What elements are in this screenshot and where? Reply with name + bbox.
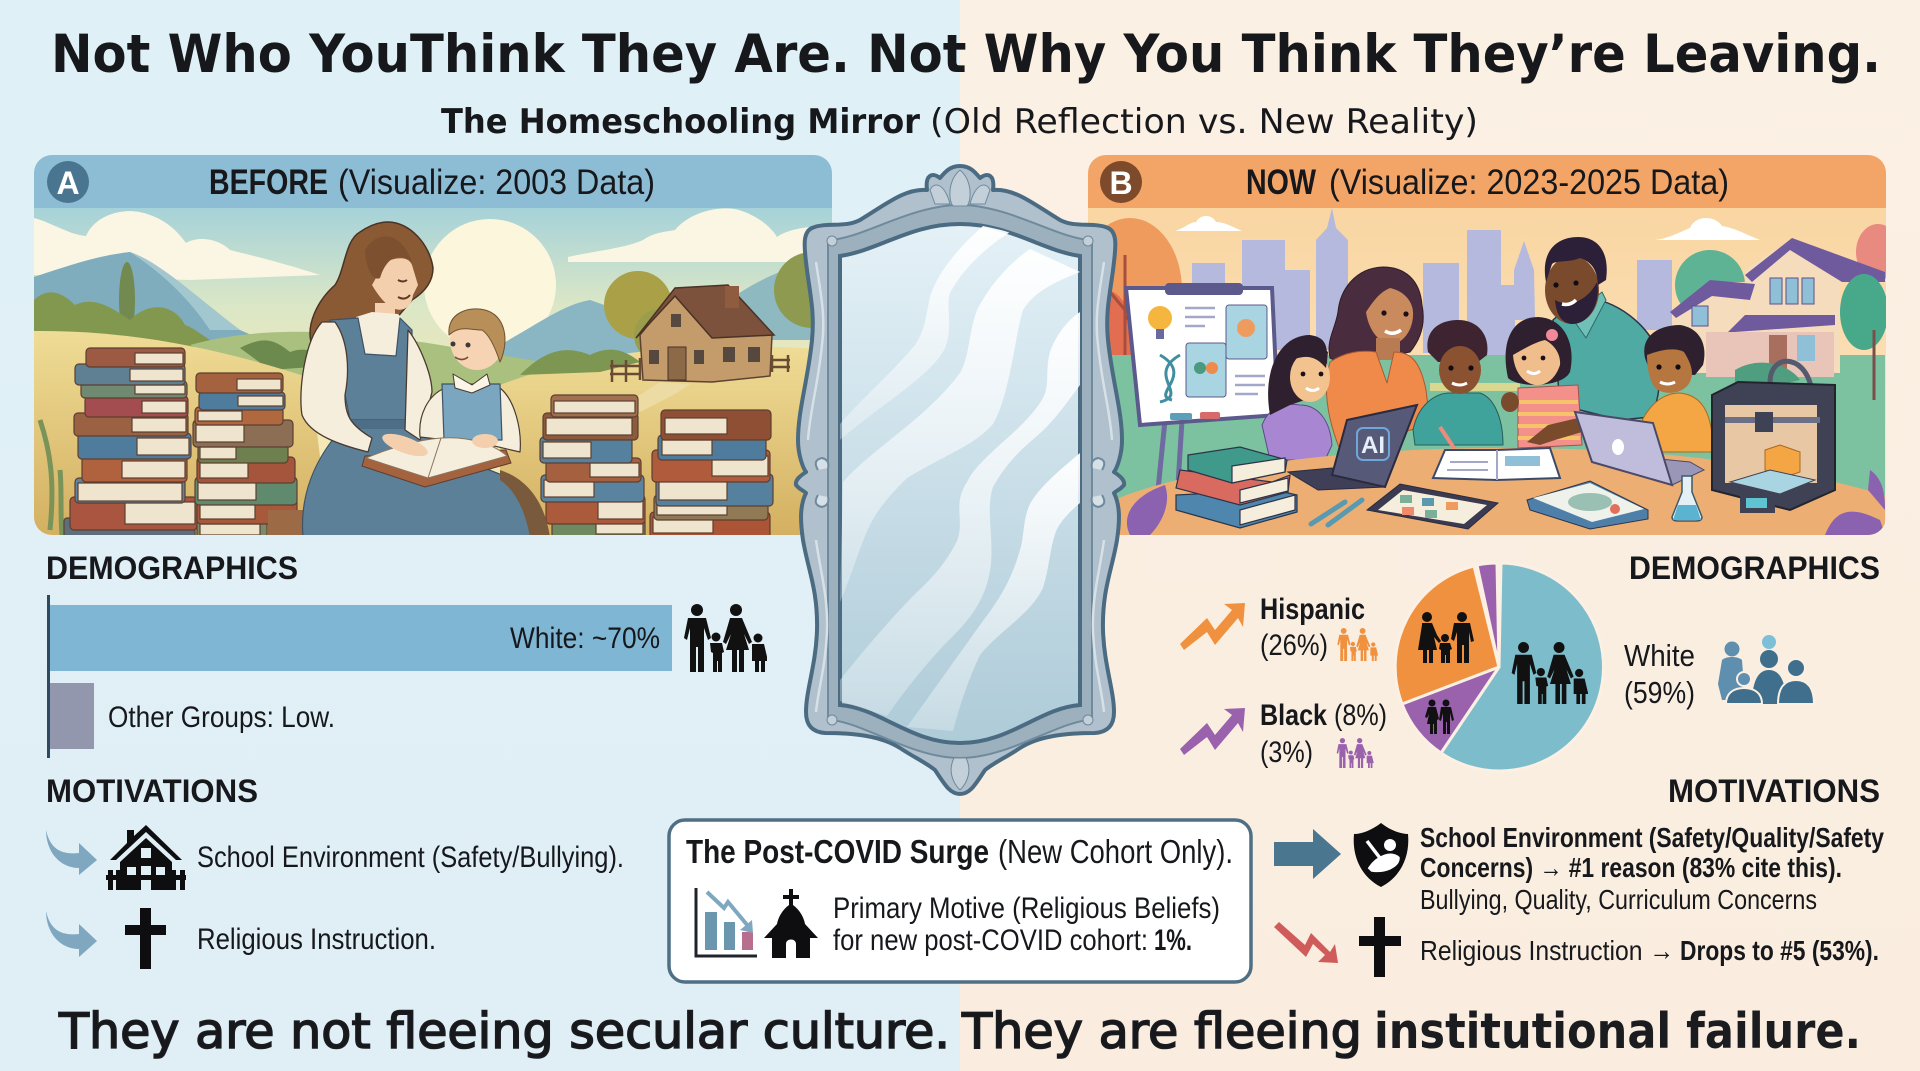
motivation: religious instruction: Religious Instruction.: [197, 923, 436, 956]
book stack 3: [540, 395, 645, 538]
suburban house: [1670, 238, 1888, 400]
AI laptop: AI: [1361, 432, 1385, 459]
arrow: red decline: [1274, 922, 1338, 963]
badge A: A: [56, 165, 80, 201]
panel: before illustration: [34, 155, 850, 538]
book pile: [1176, 447, 1297, 528]
open book: [362, 429, 511, 487]
callout: post-covid surge: (New Cohort Only).: [998, 833, 1233, 870]
child in teal: [1413, 320, 1503, 460]
panel header: now: [1088, 155, 1886, 208]
father's pointing hand: [1527, 418, 1582, 445]
label: white: [1624, 638, 1695, 710]
book stacks: [64, 348, 773, 538]
trend arrow: hispanic: [1180, 603, 1245, 650]
panel header: now: (Visualize: 2023-2025 Data): [1329, 163, 1729, 202]
rural landscape: [34, 208, 850, 535]
bottom conclusion: [58, 1003, 1861, 1060]
icon: declining bar chart: [696, 888, 757, 956]
pie chart: now demographics: [1395, 563, 1603, 771]
label: black: Black: [1260, 699, 1327, 732]
whiteboard: [1126, 283, 1278, 490]
mirror frame: [796, 166, 1124, 794]
tablet: [1367, 484, 1498, 529]
arrow: curved: [46, 911, 97, 957]
badge A: [47, 161, 89, 203]
text: religious instruction now: [1420, 935, 1879, 966]
mother: [1326, 267, 1428, 450]
heading: right demographics: DEMOGRAPHICS: [1629, 550, 1880, 586]
text: school environment now: [1420, 822, 1884, 915]
bottom conclusion: They are fleeing: [961, 1003, 1362, 1060]
bottom conclusion: They are not fleeing secular culture.: [58, 1003, 950, 1060]
3D printer: [1712, 361, 1835, 513]
book stack 4: [650, 410, 773, 538]
atlas book: [1527, 481, 1648, 529]
panel: now illustration: [1075, 155, 1900, 535]
subtitle: (Old Reflection vs. New Reality): [930, 102, 1478, 142]
callout: post-covid surge: 1%.: [1154, 924, 1192, 957]
label: white: (59%): [1624, 675, 1695, 710]
panel header: before: BEFORE: [209, 163, 328, 202]
icon: church: [764, 889, 818, 958]
boy: [420, 309, 520, 452]
foliage corners: [1127, 470, 1885, 535]
icon: diverse group: [1718, 635, 1814, 704]
AI laptop: [1288, 405, 1417, 490]
label: black: [1260, 699, 1387, 769]
heading: left demographics: DEMOGRAPHICS: [46, 550, 298, 586]
badge B: B: [1109, 165, 1133, 201]
label: black: (8%): [1334, 699, 1387, 732]
child in stripes: [1501, 317, 1582, 448]
icon: cross: [1359, 917, 1401, 977]
silver laptop: [1575, 412, 1704, 485]
badge B: [1100, 161, 1142, 203]
callout: post-covid surge: for new post-COVID cohort:: [833, 924, 1148, 957]
bar: white 70%: White: ~70%: [510, 622, 660, 655]
label: hispanic: (26%): [1260, 629, 1328, 662]
background: left half: [0, 0, 960, 1071]
panel header: now: NOW: [1246, 163, 1316, 202]
subtitle: [441, 102, 1478, 142]
icon: cross: [125, 908, 166, 969]
panel header: before: [34, 155, 832, 208]
text: religious instruction now: Religious Instruction →: [1420, 935, 1674, 966]
urban backdrop: [1075, 208, 1900, 535]
label: hispanic: Hispanic: [1260, 593, 1365, 626]
child in yellow: [1640, 325, 1713, 452]
trend arrow: black: [1180, 708, 1245, 755]
icon: family, white slice: [1512, 642, 1588, 704]
bar: other groups: [50, 683, 335, 749]
motivation: school environment: [46, 825, 624, 890]
flask: [1672, 476, 1702, 521]
arrow: curved: [46, 830, 97, 875]
motivation: religious instruction: [46, 908, 436, 969]
icon: small family, black: [1337, 738, 1374, 768]
mother reading: [268, 222, 550, 537]
arrow: block right: [1274, 829, 1341, 879]
child in purple: [1262, 335, 1332, 460]
callout: post-covid surge: Primary Motive (Religious Beliefs): [833, 892, 1220, 925]
book stack 1: [64, 348, 197, 538]
heading: right motivations: MOTIVATIONS: [1668, 773, 1880, 809]
mirror glass: [840, 224, 1080, 743]
text: school environment now: Bullying, Quality, Curriculum Concerns: [1420, 884, 1817, 915]
callout: post-covid surge: The Post-COVID Surge: [686, 833, 989, 870]
chart: before demographics bars: [47, 595, 672, 758]
open workbook: [1433, 448, 1560, 480]
subtitle: The Homeschooling Mirror: [441, 102, 920, 142]
bar: white 70%: [50, 605, 672, 671]
motivation: school environment: School Environment (Safety/Bullying).: [197, 841, 624, 874]
label: hispanic: [1260, 593, 1365, 662]
bottom conclusion: institutional failure.: [1374, 1003, 1861, 1060]
label: black: (3%): [1260, 736, 1313, 769]
heading: left motivations: MOTIVATIONS: [46, 773, 258, 809]
background: right half: [960, 0, 1920, 1071]
icon: family: [684, 604, 768, 672]
icon: house: [106, 825, 186, 890]
father: [1545, 237, 1659, 420]
pencils: [1311, 500, 1362, 525]
icon: small family, hispanic: [1337, 628, 1378, 661]
farmhouse: [40, 285, 790, 535]
icon: family, black slice: [1425, 700, 1454, 734]
icon: shield: [1354, 823, 1408, 887]
text: religious instruction now: Drops to #5 (53%).: [1680, 935, 1879, 966]
bar: other groups: Other Groups: Low.: [108, 701, 335, 734]
label: white: White: [1624, 638, 1695, 673]
ornate mirror: [796, 166, 1124, 794]
panel header: before: (Visualize: 2003 Data): [338, 163, 655, 202]
icon: family, hispanic slice: [1418, 612, 1474, 663]
table: [1088, 448, 1885, 535]
book stack 2: [193, 373, 297, 538]
callout: post-covid surge: [669, 820, 1251, 982]
